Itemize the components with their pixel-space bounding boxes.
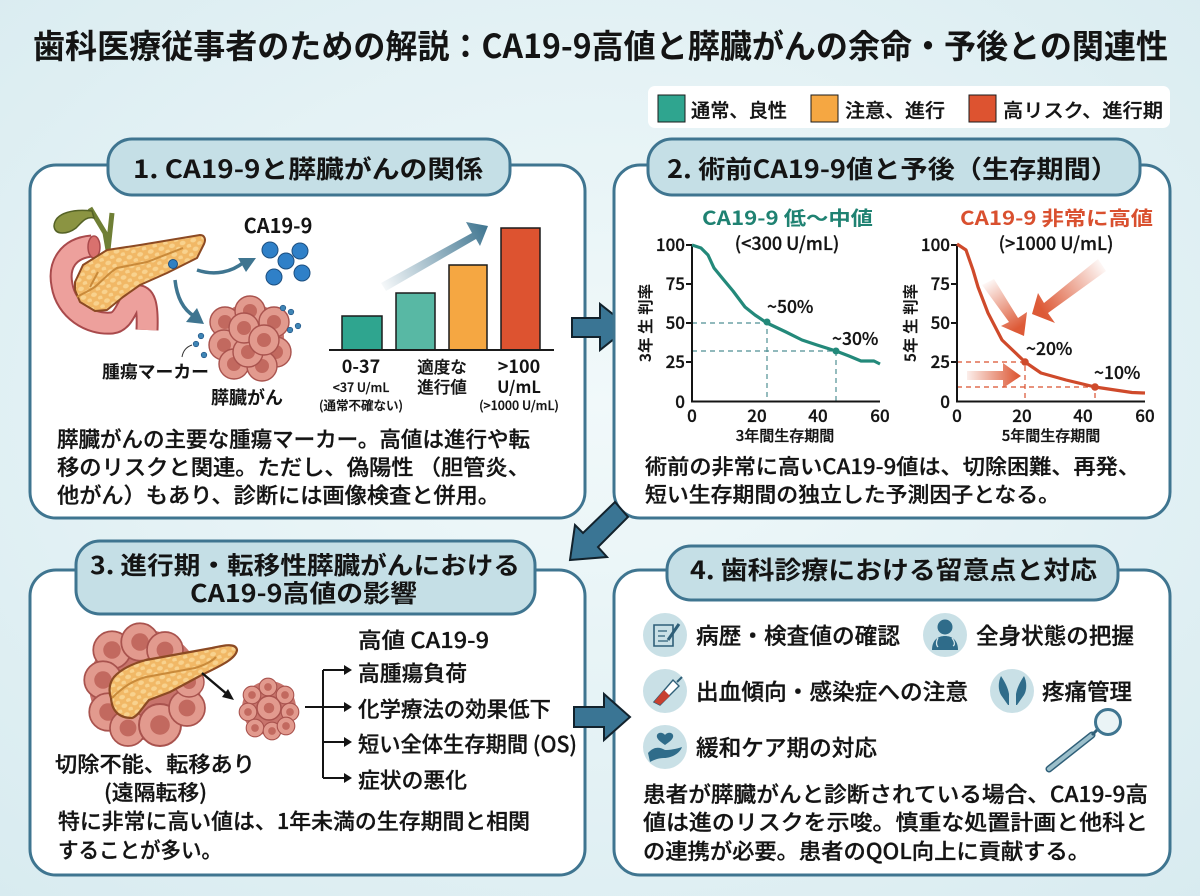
bar chart: (通常不確ない): [319, 395, 403, 414]
item: palliative care: [643, 725, 877, 769]
panel 1 heading: [108, 139, 510, 195]
label: pancreatic cancer: 膵臓がん: [211, 384, 283, 410]
chart: very high CA19-9: 5年 生 判率: [899, 284, 921, 362]
chart: low to moderate CA19-9: 40: [808, 402, 828, 427]
effects list: 化学療法の効果低下: [358, 693, 551, 724]
leader line: [182, 345, 192, 357]
arrow: panel 1 to panel 2: [572, 304, 629, 350]
panel 4 text: 値は進のリスクを示唆。慎重な処置計画と他科と: [643, 806, 1148, 837]
panel 3: advanced and metastatic disease: [30, 541, 585, 875]
chart: very high CA19-9: ~20%: [1026, 336, 1072, 361]
bar chart: [319, 222, 559, 414]
chart: very high CA19-9: 60: [1135, 402, 1155, 427]
item: general condition: 全身状態の把握: [976, 619, 1134, 651]
arrows: emphasis on high values: [967, 259, 1106, 388]
bar chart: 進行値: [417, 374, 467, 398]
panel 2 text: [645, 451, 1140, 509]
panel 2 text: 術前の非常に高いCA19-9値は、切除困難、再発、: [645, 451, 1140, 481]
chart: low to moderate CA19-9: (<300 U/mL): [735, 230, 839, 256]
panel 3 text: 特に非常に高い値は、1年未満の生存期間と相関: [58, 805, 530, 836]
panel 3 text: することが多い。: [58, 834, 222, 865]
chart: very high CA19-9: 75: [931, 270, 950, 295]
arrow: panel 3 to panel 4: [574, 694, 630, 740]
bar chart: (>1000 U/mL): [479, 395, 559, 414]
icon: dental mirror: [1049, 710, 1120, 769]
chart: very high CA19-9: (>1000 U/mL): [999, 230, 1113, 256]
icon: marker dots: [193, 305, 301, 358]
chart: very high CA19-9: 5年間生存期間: [1002, 425, 1100, 446]
tree arrows: [305, 665, 352, 783]
panel 4 heading: 4. 歯科診療における留意点と対応: [690, 551, 1097, 587]
item: history and lab values: [643, 613, 900, 657]
panel 4 text: の連携が必要。患者のQOL向上に貢献する。: [643, 835, 1090, 866]
panel 3 heading: 3. 進行期・転移性膵臓がんにおける: [90, 547, 520, 582]
chart: low to moderate CA19-9: [634, 202, 890, 446]
chart: low to moderate CA19-9: 0: [675, 388, 685, 413]
item: palliative care: 緩和ケア期の対応: [696, 731, 877, 763]
chart: very high CA19-9: 20: [1012, 402, 1032, 427]
chart: very high CA19-9: 0: [940, 388, 950, 413]
chart: very high CA19-9: 0: [952, 402, 962, 427]
panel 4 text: 患者が膵臓がんと診断されている場合、CA19-9高: [643, 778, 1148, 809]
icon: CA19-9 molecules: [262, 242, 310, 285]
panel 2 heading: 2. 術前CA19-9値と予後（生存期間）: [667, 150, 1118, 186]
panel 4 text: [643, 778, 1148, 866]
chart: very high CA19-9: 50: [931, 309, 950, 334]
panel 4: dental care considerations: [614, 546, 1170, 875]
title: 歯科医療従事者のための解説：CA19-9高値と膵臓がんの余命・予後との関連性: [33, 20, 1168, 68]
chart: low to moderate CA19-9: 60: [870, 402, 890, 427]
bar chart: <37 U/mL: [333, 377, 389, 396]
item: bleeding and infection: 出血傾向・感染症への注意: [696, 675, 968, 707]
icon: metastatic tumor: [239, 678, 299, 740]
label: unresectable, metastasis: [55, 748, 255, 807]
bar chart: U/mL: [497, 374, 541, 398]
chart: low to moderate CA19-9: 3年 生 判率: [634, 284, 656, 362]
panel 4 heading: [667, 546, 1118, 600]
chart: low to moderate CA19-9: 3年間生存期間: [736, 425, 834, 446]
legend: 高リスク、進行期: [1003, 96, 1163, 123]
item: pain management: 疼痛管理: [1042, 675, 1132, 707]
arrow to CA19-9: [197, 258, 256, 273]
panel 1 text: 膵臓がんの主要な腫瘍マーカー。高値は進行や転: [57, 423, 530, 454]
chart: very high CA19-9: CA19-9 非常に高値: [960, 202, 1153, 231]
icon: pancreas with tumor mass: [84, 623, 237, 746]
panel 1 heading: 1. CA19-9と膵臓がんの関係: [133, 150, 483, 186]
chart: very high CA19-9: ~10%: [1094, 360, 1140, 385]
chart: low to moderate CA19-9: 75: [666, 270, 685, 295]
effects list: 高値 CA19-9: [358, 624, 489, 655]
chart: very high CA19-9: 25: [931, 348, 950, 373]
chart: low to moderate CA19-9: 100: [656, 231, 685, 256]
chart: low to moderate CA19-9: CA19-9 低〜中値: [702, 202, 873, 231]
panel 3 text: [58, 805, 530, 865]
panel 2: preoperative CA19-9 and prognosis: [614, 139, 1170, 518]
chart: low to moderate CA19-9: 25: [666, 348, 685, 373]
effects list: 症状の悪化: [358, 764, 467, 795]
item: history and lab values: 病歴・検査値の確認: [696, 619, 900, 651]
bar chart: 適度な: [417, 354, 467, 378]
chart: low to moderate CA19-9: ~50%: [767, 294, 813, 319]
chart: low to moderate CA19-9: ~30%: [832, 326, 878, 351]
icon: pancreatic tumor: [209, 296, 291, 381]
panel 2 text: 短い生存期間の独立した予測因子となる。: [645, 479, 1060, 509]
panel 1 text: 他がん）もあり、診断には画像検査と併用。: [57, 479, 500, 510]
effects list: [358, 624, 577, 795]
label: unresectable, metastasis: 切除不能、転移あり: [55, 748, 255, 779]
chart: low to moderate CA19-9: 20: [747, 402, 767, 427]
panel 1: CA19-9 and pancreatic cancer: [30, 139, 585, 518]
legend: [648, 86, 1170, 128]
panel 2 heading: [648, 139, 1140, 195]
chart: low to moderate CA19-9: 50: [666, 309, 685, 334]
arrow to tumor: [175, 280, 204, 324]
panel 1 text: 移のリスクと関連。ただし、偽陽性 （胆管炎、: [57, 451, 530, 482]
chart: very high CA19-9: 100: [921, 231, 950, 256]
label: unresectable, metastasis: (遠隔転移): [104, 777, 207, 807]
chart: very high CA19-9: 40: [1073, 402, 1093, 427]
effects list: 短い全体生存期間 (OS): [358, 728, 577, 759]
arrow: panel 2 to panel 3: [570, 502, 628, 560]
item: bleeding and infection: [643, 669, 968, 713]
effects list: 高腫瘍負荷: [358, 657, 467, 688]
panel 1 text: [57, 423, 530, 510]
item: general condition: [923, 613, 1134, 657]
item: pain management: [990, 669, 1132, 713]
bar chart: 0-37: [342, 353, 380, 379]
legend: 注意、進行: [845, 96, 945, 123]
icon: pancreas and duodenum: [54, 208, 205, 330]
arrow to metastasis: [202, 673, 234, 700]
label: tumor marker: 腫瘍マーカー: [102, 359, 209, 384]
panel 3 heading: CA19-9高値の影響: [190, 575, 417, 610]
label: CA19-9: CA19-9: [244, 210, 312, 239]
bar chart: >100: [498, 353, 540, 379]
chart: low to moderate CA19-9: 0: [687, 402, 697, 427]
chart: very high CA19-9: [899, 202, 1155, 446]
panel 3 heading: [76, 541, 535, 614]
legend: 通常、良性: [691, 96, 787, 123]
